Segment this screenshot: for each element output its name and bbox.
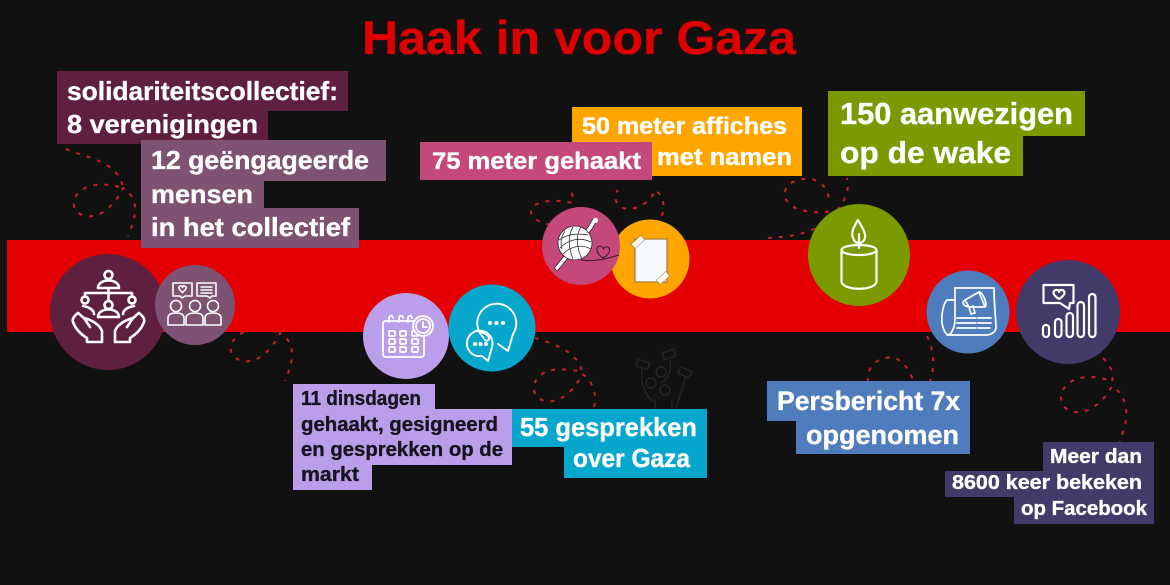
text: 150 aanwezigen bbox=[840, 96, 1073, 170]
text: facebook: Meer dan bbox=[1050, 446, 1142, 468]
text: 11 dinsdagen: en gesprekken op de bbox=[301, 439, 503, 461]
panel: solidariteitscollectief bbox=[57, 71, 348, 144]
icon: newspaper with megaphone bbox=[926, 270, 1010, 354]
text: solidariteitscollectief: solidariteitscollectief: bbox=[67, 76, 338, 106]
text: persbericht: opgenomen bbox=[806, 420, 959, 450]
panel: persbericht bbox=[767, 381, 970, 454]
text: persbericht: Persbericht 7x bbox=[777, 386, 960, 416]
text: 55 gesprekken bbox=[520, 412, 697, 473]
icon: calendar with clock bbox=[363, 293, 449, 379]
text: facebook: op Facebook bbox=[1021, 498, 1148, 520]
text: 11 dinsdagen: markt bbox=[301, 464, 359, 486]
text: 11 dinsdagen bbox=[301, 388, 503, 486]
panel: 11 dinsdagen bbox=[293, 384, 512, 490]
label background: facebook bbox=[945, 442, 1154, 524]
red band bbox=[7, 240, 1170, 332]
text: 75 meter gehaakt: 75 meter gehaakt bbox=[432, 148, 641, 175]
label background: mensen bbox=[141, 140, 386, 248]
label background: wake bbox=[828, 91, 1085, 176]
text: facebook: 8600 keer bekeken bbox=[952, 472, 1142, 494]
text: 12 geengageerde mensen: in het collectief bbox=[151, 212, 350, 242]
text: 55 gesprekken: over Gaza bbox=[573, 443, 690, 473]
label background: collectief bbox=[57, 71, 348, 144]
text: persbericht bbox=[777, 386, 960, 450]
panel: 55 gesprekken bbox=[512, 409, 707, 478]
icon: people with speech bubbles bbox=[155, 265, 235, 345]
text: 12 geengageerde mensen bbox=[151, 145, 369, 242]
text: 11 dinsdagen: gehaakt, gesigneerd bbox=[301, 414, 498, 436]
text: 11 dinsdagen: 11 dinsdagen bbox=[301, 388, 421, 410]
icon: candle bbox=[808, 204, 910, 306]
text: 50 meter affiches bbox=[582, 113, 792, 171]
text: 12 geengageerde mensen: 12 geëngageerde bbox=[151, 145, 369, 175]
label background: dinsdagen bbox=[293, 384, 512, 490]
icon: network held by hands bbox=[50, 254, 166, 370]
label background: persbericht bbox=[767, 381, 970, 454]
dashed connector lines bbox=[66, 149, 1126, 442]
panel: 12 mensen bbox=[141, 140, 386, 248]
text: solidariteitscollectief bbox=[67, 76, 338, 139]
label background: gesprekken bbox=[512, 409, 707, 478]
title: Haak in voor Gaza bbox=[362, 11, 797, 64]
text: 50 meter affiches: met namen bbox=[657, 144, 792, 171]
panel: 150 aanwezigen bbox=[828, 91, 1085, 176]
text: facebook bbox=[952, 446, 1148, 520]
panel: 75 meter gehaakt bbox=[420, 142, 652, 180]
text: 55 gesprekken: 55 gesprekken bbox=[520, 412, 697, 442]
text: 12 geengageerde mensen: mensen bbox=[151, 179, 253, 209]
icon: analytics with heart bubble bbox=[1016, 260, 1120, 364]
text: 50 meter affiches: 50 meter affiches bbox=[582, 113, 787, 140]
label background: gehaakt bbox=[420, 142, 652, 180]
panel: 50 meter affiches bbox=[572, 107, 802, 176]
icon: faint protest crowd bbox=[636, 349, 692, 409]
text: 150 aanwezigen: 150 aanwezigen bbox=[840, 96, 1073, 131]
icon: yarn and crochet hook bbox=[542, 207, 620, 285]
icon: poster with tape bbox=[610, 220, 690, 298]
label background: affiches bbox=[572, 107, 802, 176]
panel: facebook bbox=[945, 442, 1154, 524]
icon: speech bubbles bbox=[448, 284, 536, 372]
text: solidariteitscollectief: 8 verenigingen bbox=[67, 109, 258, 139]
text: 150 aanwezigen: op de wake bbox=[840, 135, 1011, 170]
